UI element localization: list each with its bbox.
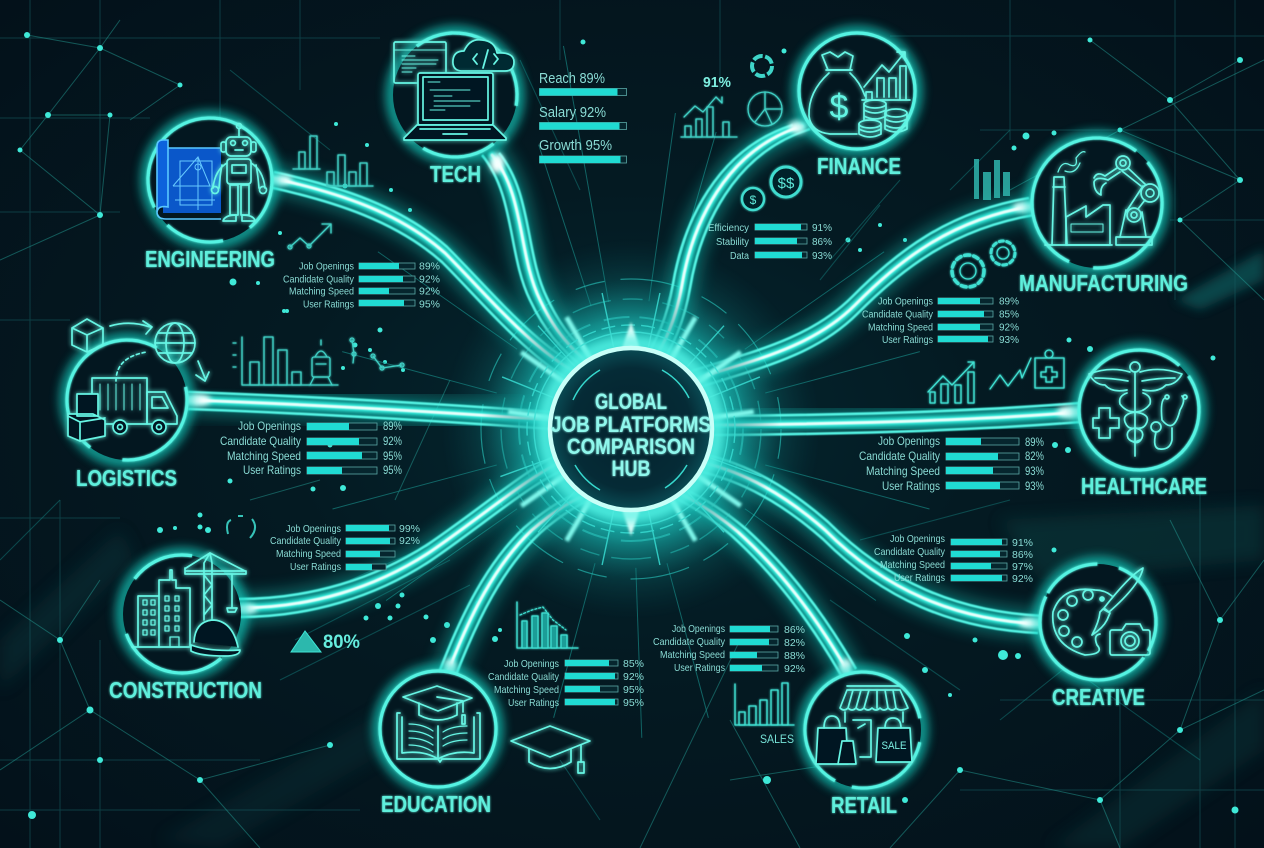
panel: education	[379, 670, 497, 788]
table: finance metrics: Efficiency	[708, 223, 749, 234]
table: retail metrics: 82%	[784, 637, 805, 649]
table: tech metrics	[539, 70, 626, 163]
panel: creative	[1019, 543, 1177, 701]
label: tech: TECH	[430, 161, 481, 187]
table: retail metrics	[653, 623, 805, 675]
beam: tech	[482, 153, 601, 368]
table: finance metrics	[708, 223, 832, 262]
icon: caduceus	[1089, 362, 1182, 456]
table: engineering metrics: User Ratings	[303, 298, 354, 310]
label: education: EDUCATION	[381, 791, 491, 817]
icon: gears	[952, 241, 1015, 287]
table: construction metrics: Candidate Quality	[270, 535, 342, 547]
icon: robot arm	[1094, 156, 1159, 245]
table: education metrics: 95%	[623, 697, 644, 709]
panel: tech	[383, 23, 527, 167]
table: logistics metrics: 89%	[383, 419, 402, 433]
table: retail metrics: 86%	[784, 624, 805, 636]
title: HUB	[612, 456, 650, 481]
icon: box and arrow	[72, 319, 152, 352]
table: healthcare metrics: 93%	[1025, 479, 1044, 493]
label: finance: FINANCE	[817, 153, 901, 179]
table: retail metrics: 88%	[784, 650, 805, 662]
table: engineering metrics: Candidate Quality	[283, 274, 355, 286]
panel: construction	[122, 553, 246, 674]
table: healthcare metrics: 89%	[1025, 435, 1044, 449]
table: manufacturing metrics	[862, 296, 1019, 346]
icon: buildings	[132, 570, 192, 647]
table: education metrics: 92%	[623, 671, 644, 683]
chart: sales bars	[735, 683, 794, 725]
title: GLOBAL	[595, 389, 667, 414]
table: manufacturing metrics: Job Openings	[878, 296, 933, 308]
table: manufacturing metrics: User Ratings	[882, 335, 933, 346]
table: construction metrics: User Ratings	[290, 561, 341, 573]
beam: creative	[698, 454, 1045, 633]
table: logistics metrics: 95%	[383, 449, 402, 463]
icon: triangle	[291, 631, 321, 652]
panel: finance	[798, 32, 916, 150]
table: finance metrics: Data	[730, 251, 749, 262]
label: manufacturing: MANUFACTURING	[1019, 270, 1188, 296]
table: logistics metrics: 92%	[383, 434, 402, 448]
icon: rising arrow	[288, 224, 331, 249]
label: construction: CONSTRUCTION	[109, 677, 262, 703]
table: education metrics: User Ratings	[508, 697, 559, 709]
icon: cloud code	[453, 40, 514, 71]
table: logistics metrics: Matching Speed	[227, 449, 301, 463]
panel: logistics	[62, 319, 209, 465]
beam: construction	[233, 451, 565, 617]
table: retail metrics: User Ratings	[674, 662, 725, 674]
table: tech metrics: Salary 92%	[539, 104, 606, 121]
icon: browser window	[394, 42, 446, 83]
icon: stethoscope	[1151, 395, 1187, 449]
table: logistics metrics: Candidate Quality	[220, 434, 301, 448]
chart: engineering bars	[293, 136, 373, 186]
text: 80 percent: 80%	[323, 632, 360, 653]
beam: manufacturing	[689, 198, 1039, 389]
beam: logistics	[181, 392, 552, 429]
table: retail metrics: Job Openings	[672, 623, 725, 635]
table: creative metrics: 97%	[1012, 561, 1033, 573]
panel: healthcare	[1054, 325, 1224, 495]
table: logistics metrics	[220, 419, 402, 477]
table: education metrics: Candidate Quality	[488, 671, 560, 683]
icon: medical cross	[1093, 408, 1119, 438]
decoration: constellation	[350, 338, 404, 370]
table: engineering metrics: Job Openings	[299, 260, 354, 272]
table: education metrics: 95%	[623, 684, 644, 696]
text: 91 percent: 91%	[703, 74, 731, 91]
text: sales: SALES	[760, 732, 794, 746]
icon: camera	[1110, 624, 1150, 655]
table: construction metrics: Matching Speed	[276, 548, 341, 560]
radial rays around hub	[333, 46, 929, 738]
table: construction metrics: 99%	[399, 523, 420, 535]
table: healthcare metrics	[859, 434, 1044, 493]
icon: robot	[212, 124, 266, 221]
table: engineering metrics: Matching Speed	[289, 286, 354, 298]
table: creative metrics	[874, 533, 1033, 585]
table: retail metrics: 92%	[784, 663, 805, 675]
icon: money bag: $	[830, 88, 849, 126]
chart: healthcare trend	[928, 358, 1031, 403]
connector beams	[181, 121, 1087, 677]
beam: retail	[661, 485, 856, 677]
table: construction metrics	[270, 523, 420, 573]
chart: finance trend	[681, 97, 737, 137]
icon: laptop	[404, 73, 506, 140]
table: healthcare metrics: Candidate Quality	[859, 449, 940, 463]
icon: palette	[1053, 589, 1112, 655]
icon: shopping bags	[816, 716, 912, 764]
beam: education	[440, 488, 606, 677]
table: healthcare metrics: User Ratings	[882, 479, 940, 493]
table: finance metrics: 93%	[812, 251, 832, 262]
table: tech metrics: Reach 89%	[539, 70, 605, 87]
icon: coin dollars	[742, 167, 801, 210]
table: education metrics	[488, 658, 644, 709]
table: retail metrics: Candidate Quality	[653, 636, 726, 648]
icon: crane	[185, 553, 246, 620]
icon: truck	[68, 352, 177, 441]
chart: logistics bars	[233, 337, 338, 385]
icon: donut	[752, 56, 772, 76]
table: engineering metrics: 92%	[419, 274, 440, 286]
table: logistics metrics: User Ratings	[243, 463, 301, 477]
table: creative metrics: Job Openings	[890, 533, 945, 545]
table: healthcare metrics: Job Openings	[878, 434, 940, 448]
table: manufacturing metrics: Matching Speed	[868, 322, 933, 334]
table: engineering metrics: 92%	[419, 286, 440, 298]
table: engineering metrics: 89%	[419, 260, 440, 272]
table: creative metrics: 86%	[1012, 549, 1033, 561]
table: engineering metrics	[283, 260, 440, 310]
table: healthcare metrics: 82%	[1025, 449, 1044, 463]
icon: hard hat	[191, 620, 240, 656]
icon: growth chart and coins	[859, 52, 910, 137]
table: education metrics: 85%	[623, 658, 644, 670]
icon: clipboard cross	[1035, 350, 1064, 388]
table: construction metrics: 92%	[399, 535, 420, 547]
table: healthcare metrics: 93%	[1025, 464, 1044, 478]
icon: paintbrush	[1092, 568, 1143, 635]
icon: graduation cap and book	[397, 686, 480, 762]
table: finance metrics: 86%	[812, 237, 832, 248]
label: creative: CREATIVE	[1052, 684, 1145, 710]
chart: education bars	[517, 602, 578, 648]
table: education metrics: Job Openings	[504, 658, 559, 670]
title: COMPARISON	[567, 434, 695, 459]
table: manufacturing metrics: 89%	[999, 296, 1019, 308]
icon: coin dollars: $$	[778, 175, 795, 192]
beam: healthcare	[712, 403, 1087, 435]
table: engineering metrics: 95%	[419, 298, 440, 310]
table: healthcare metrics: Matching Speed	[866, 464, 940, 478]
table: tech metrics: Growth 95%	[539, 137, 612, 154]
icon: storefront	[840, 686, 908, 757]
panel: engineering	[131, 101, 289, 259]
table: creative metrics: Candidate Quality	[874, 546, 946, 558]
icon: pie chart	[748, 92, 782, 126]
label: logistics: LOGISTICS	[76, 465, 177, 491]
icon: blueprint	[157, 140, 221, 219]
beam: finance	[643, 121, 810, 367]
label: healthcare: HEALTHCARE	[1081, 473, 1207, 499]
label: retail: RETAIL	[831, 792, 897, 818]
table: logistics metrics: 95%	[383, 463, 402, 477]
title	[551, 389, 711, 481]
table: finance metrics: Stability	[716, 237, 749, 248]
text: sale tag: SALE	[882, 740, 906, 752]
table: logistics metrics: Job Openings	[238, 419, 301, 433]
table: finance metrics: 91%	[812, 223, 832, 234]
table: manufacturing metrics: 93%	[999, 335, 1019, 346]
icon: factory	[1045, 152, 1112, 245]
table: creative metrics: 92%	[1012, 573, 1033, 585]
panel: manufacturing	[1008, 114, 1186, 292]
table: education metrics: Matching Speed	[494, 684, 559, 696]
table: creative metrics: User Ratings	[894, 572, 945, 584]
icon: mortarboard	[511, 726, 590, 773]
table: creative metrics: 91%	[1012, 537, 1033, 549]
table: creative metrics: Matching Speed	[880, 559, 945, 571]
chart: equalizer	[974, 159, 1010, 200]
decoration: orbit marks	[227, 516, 255, 538]
table: manufacturing metrics: Candidate Quality	[862, 310, 933, 320]
label: engineering: ENGINEERING	[145, 246, 275, 272]
icon: coin dollars: $	[750, 193, 757, 207]
table: manufacturing metrics: 92%	[999, 322, 1019, 334]
table: manufacturing metrics: 85%	[999, 310, 1019, 320]
table: construction metrics: Job Openings	[286, 523, 341, 535]
beam: engineering	[268, 172, 594, 389]
panel: retail	[789, 656, 937, 804]
table: retail metrics: Matching Speed	[660, 649, 725, 661]
central hub	[481, 279, 781, 579]
title: JOB PLATFORMS	[551, 412, 711, 437]
icon: small robot	[310, 340, 332, 385]
icon: globe	[155, 323, 209, 381]
